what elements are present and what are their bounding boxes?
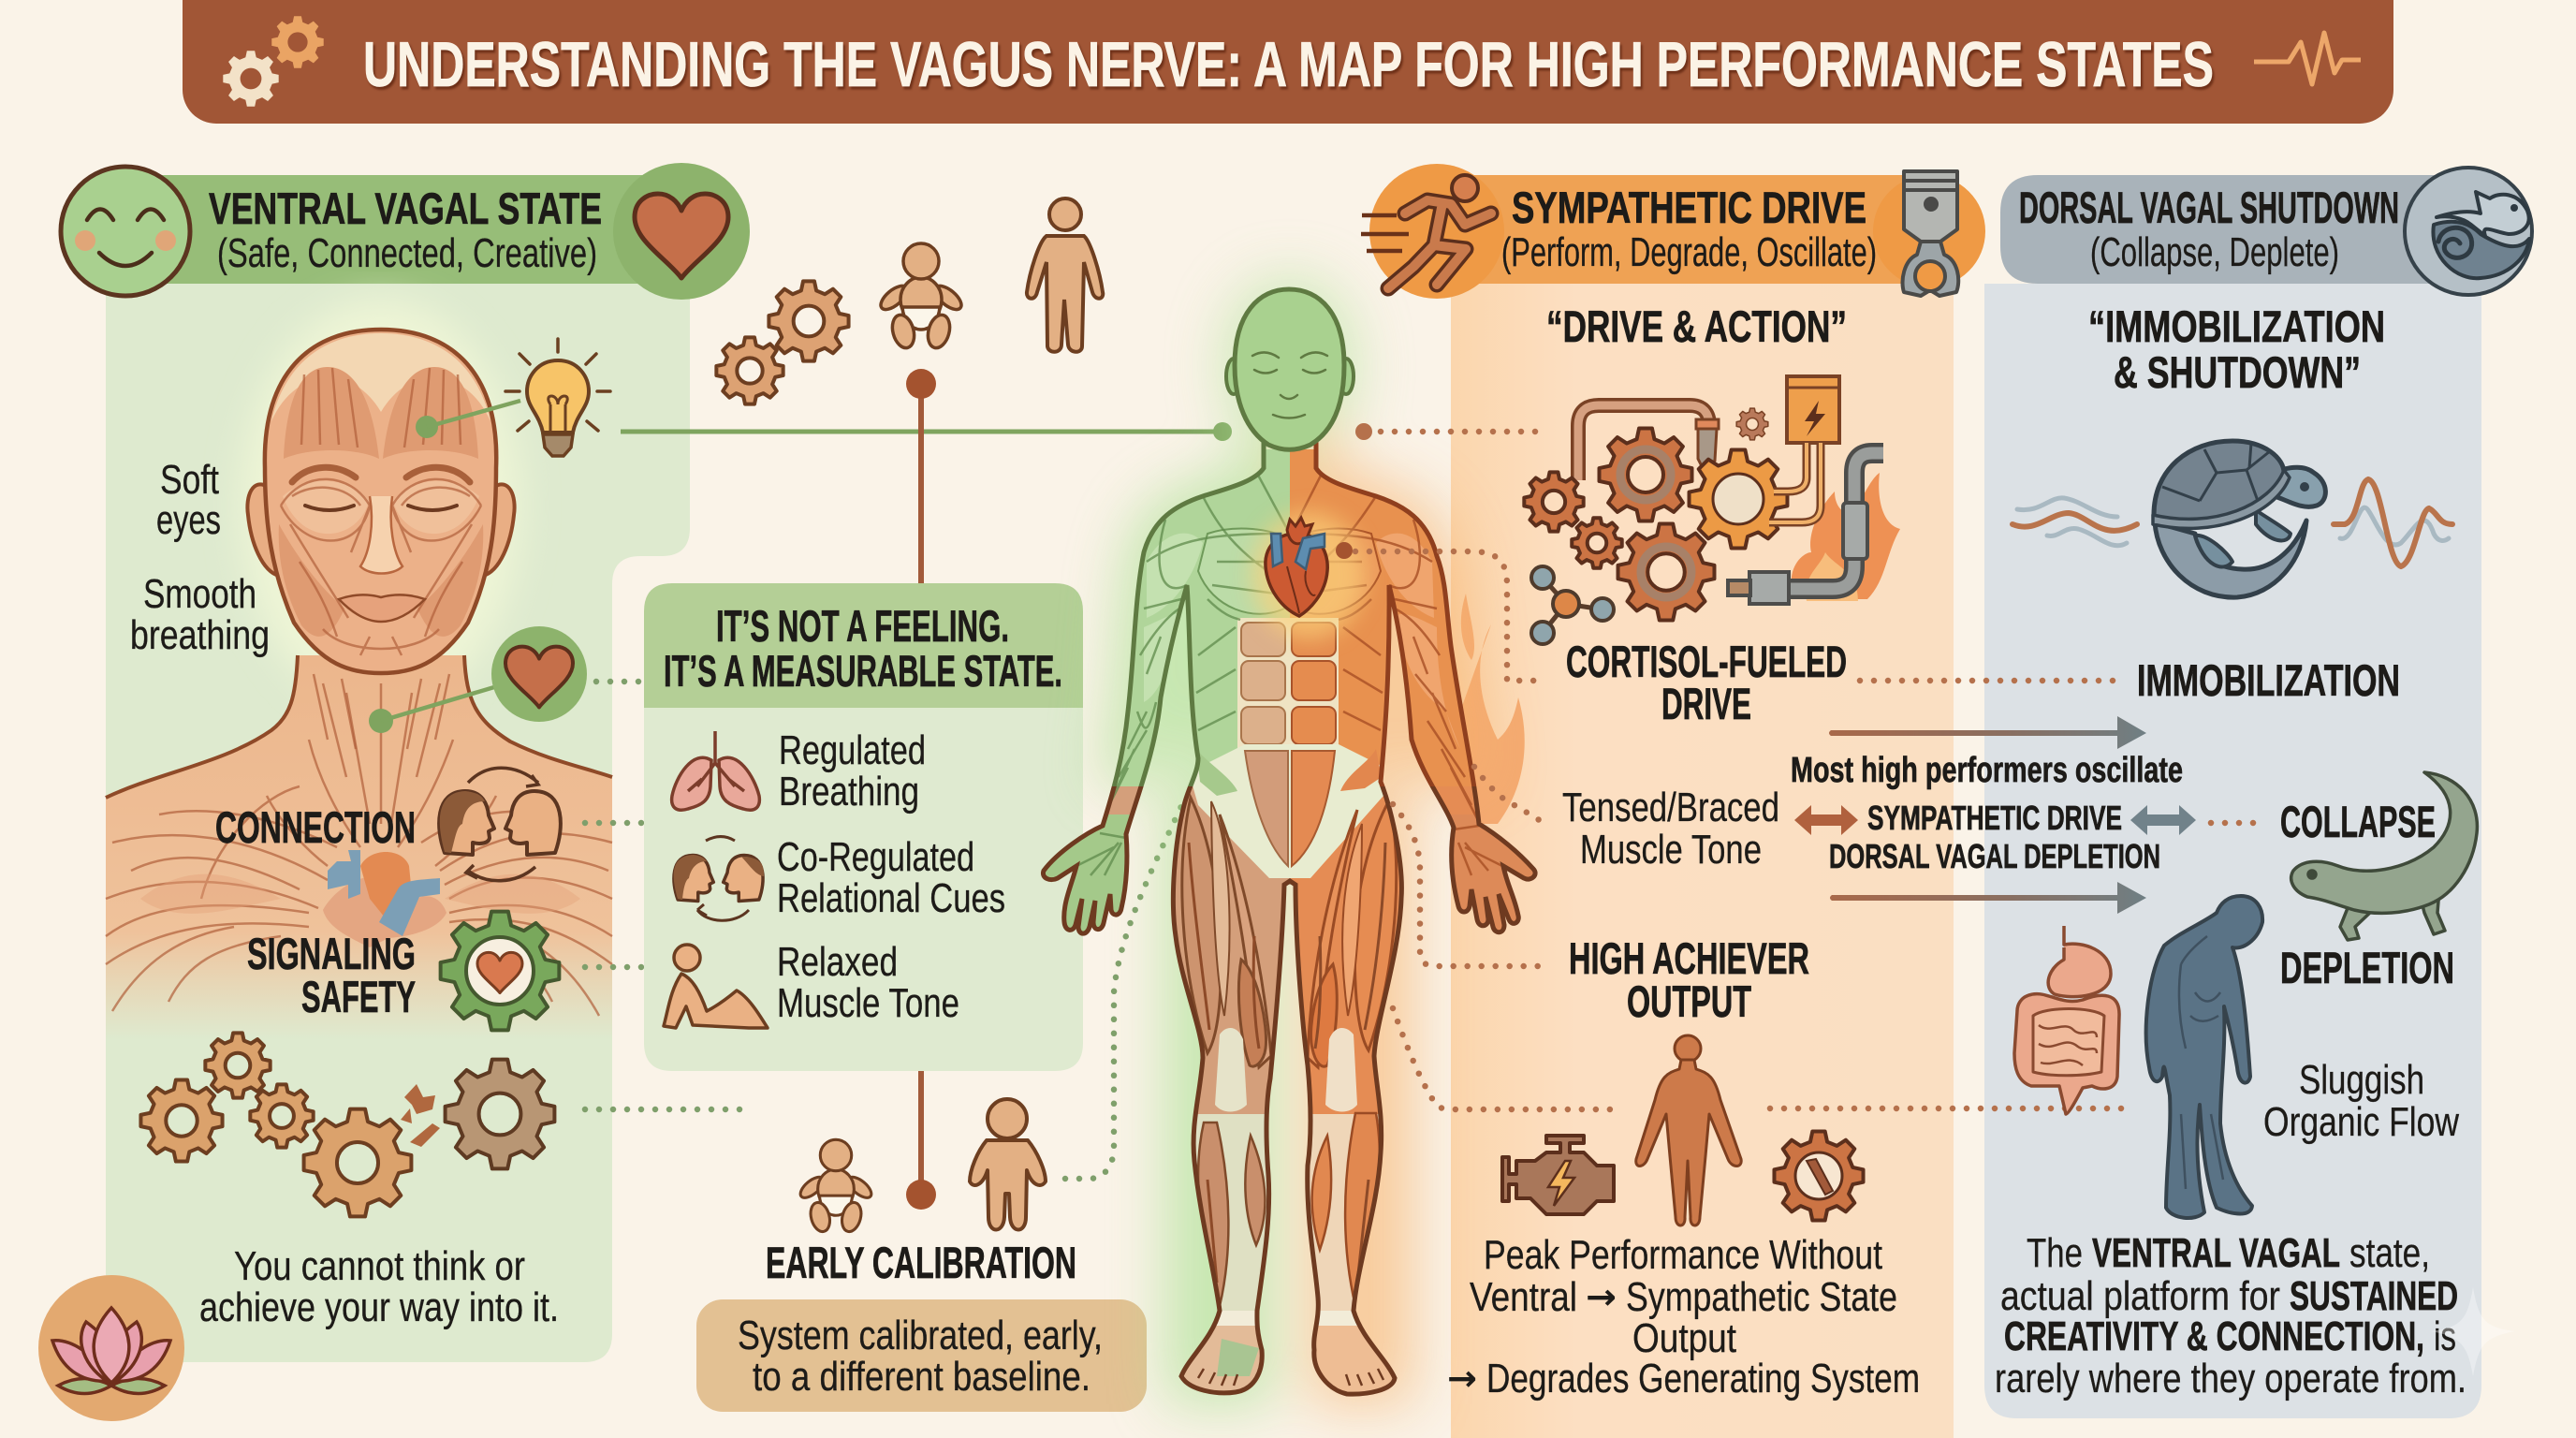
- icon: curled salamander: [2405, 168, 2532, 295]
- label: connection: CONNECTION: [215, 802, 416, 852]
- label: cortisol-fueled drive: DRIVE: [1661, 679, 1751, 728]
- icon: sparkle: [2431, 1287, 2515, 1376]
- subheading text: (Safe, Connected, Creative): [217, 230, 597, 276]
- gears: [1599, 429, 1692, 521]
- dotted connectors: ventral panel: [585, 682, 749, 1109]
- timeline connector: green line: [621, 422, 1232, 441]
- callout heading: IT’S NOT A FEELING.: [716, 601, 1009, 651]
- calf left: [1198, 1123, 1265, 1306]
- label: sluggish organic flow: Sluggish: [2299, 1057, 2424, 1103]
- head glow: [241, 300, 521, 712]
- label: collapse: COLLAPSE: [2280, 797, 2436, 846]
- ears: [1226, 359, 1241, 394]
- lower abs: [1245, 751, 1288, 866]
- icon: left waves: [2012, 498, 2137, 546]
- arm highlights right: [1376, 534, 1460, 749]
- timeline connector: brown line: [906, 369, 936, 1210]
- label: dorsal vagal depletion: DORSAL VAGAL DEPLETION: [1829, 837, 2160, 875]
- hip muscles: [1198, 753, 1237, 796]
- text: peak performance: [1447, 1232, 1920, 1401]
- right leg muscles: [1354, 800, 1397, 1050]
- text: ventral vagal platform summary: state,: [2349, 1230, 2430, 1276]
- subheading text: (Collapse, Deplete): [2090, 229, 2339, 275]
- label: co-regulated cues: Relational Cues: [777, 875, 1005, 921]
- icon: title gears: [223, 16, 324, 107]
- icon: lizard: [2291, 772, 2477, 940]
- heading text: VENTRAL VAGAL STATE: [209, 183, 602, 233]
- callout text: [738, 1313, 1103, 1400]
- nose: [360, 496, 402, 573]
- abs left: [1241, 623, 1285, 744]
- left leg muscles: [1182, 798, 1221, 1053]
- left ear: [247, 484, 281, 576]
- label: signaling safety: [247, 929, 416, 1021]
- icon: baby top: [877, 243, 965, 350]
- label: cortisol-fueled drive: [1566, 637, 1847, 728]
- label: regulated breathing: Regulated: [779, 727, 926, 773]
- text: ventral vagal platform summary: rarely where they operate from.: [1995, 1356, 2466, 1401]
- knees: [1215, 1028, 1247, 1112]
- icon: lightbulb with connector: [416, 339, 610, 456]
- text: peak performance: →: [1447, 1357, 1477, 1399]
- label: smooth breathing: Smooth: [143, 571, 256, 617]
- hand left: [1046, 814, 1130, 932]
- icon: engine gears and pipes: [1524, 376, 1900, 620]
- heading: immobilization and shutdown: & SHUTDOWN”: [2114, 347, 2361, 397]
- text: ventral vagal platform summary: [1995, 1230, 2466, 1401]
- header: dorsal vagal shutdown: [2000, 168, 2532, 295]
- icon: turtle: [2153, 441, 2325, 597]
- label: co-regulated cues: [777, 834, 1005, 921]
- body outline left: [1112, 442, 1266, 786]
- toe lines: [1198, 1369, 1383, 1386]
- fuel box: [1787, 376, 1839, 443]
- head shape: [265, 330, 496, 673]
- icon: right waves: [2334, 479, 2452, 566]
- icon: pulse line: [2254, 33, 2361, 84]
- leg fibres: [1189, 843, 1385, 1283]
- panel: ventral background: [106, 284, 690, 1362]
- icon: achiever figure: [1636, 1035, 1741, 1225]
- text: peak performance: Sympathetic State: [1626, 1274, 1897, 1320]
- icon: digestive system: [2014, 926, 2119, 1114]
- face: [1252, 352, 1327, 418]
- label: relaxed muscle tone: Relaxed: [777, 939, 898, 985]
- body outline legs: [1041, 786, 1538, 1397]
- torso: [106, 655, 612, 1040]
- mouth: [339, 594, 425, 622]
- arrow: bottom oscillation: [1830, 882, 2146, 914]
- body glow: [1043, 289, 1535, 1404]
- label: depletion: DEPLETION: [2280, 943, 2454, 992]
- text: peak performance: →: [1586, 1276, 1617, 1317]
- icon: two faces: [439, 768, 561, 881]
- icon: green gear with heart: [441, 912, 559, 1030]
- muscle detail: [281, 368, 481, 655]
- text: ventral vagal platform summary: is: [2434, 1313, 2456, 1359]
- hand fibres: [1076, 833, 1126, 875]
- grey pipe: [1787, 453, 1883, 589]
- label: sluggish organic flow: Organic Flow: [2263, 1099, 2459, 1145]
- icon: child early calibration: [970, 1099, 1046, 1230]
- dotted connectors: sympathetic: [1355, 423, 2265, 1109]
- label: smooth breathing: breathing: [130, 612, 270, 658]
- icon: running figure: [1361, 175, 1491, 288]
- icon: lotus badge: [38, 1275, 184, 1421]
- flames beside arm: [1460, 594, 1525, 824]
- heading text: SYMPATHETIC DRIVE: [1512, 183, 1866, 232]
- icon: heart badge: [613, 163, 750, 300]
- icon: baby early calibration: [797, 1139, 875, 1234]
- feet: [1183, 1326, 1260, 1391]
- icon: engine: [1502, 1136, 1614, 1214]
- label: sluggish organic flow: [2263, 1057, 2459, 1145]
- label: soft eyes: eyes: [156, 497, 221, 543]
- text: you cannot think: You cannot think or: [234, 1243, 525, 1289]
- icon: broken gears: [140, 1033, 554, 1216]
- abs right: [1292, 623, 1336, 744]
- scalp highlight: [271, 333, 490, 421]
- copper pipe: [1578, 405, 1709, 480]
- head: [1235, 289, 1344, 449]
- icon: small gears: [716, 281, 849, 404]
- icon: co-regulated faces: [674, 837, 764, 920]
- pecs: [1198, 529, 1286, 614]
- chest fibres: [106, 683, 612, 1016]
- arm highlights left: [1144, 534, 1203, 702]
- callout: measurable state: [644, 583, 1083, 1071]
- heading: drive and action: “DRIVE & ACTION”: [1546, 301, 1847, 351]
- body outline right: [1314, 442, 1477, 786]
- illustration: face and chest: [106, 300, 612, 1040]
- label: high achiever output: OUTPUT: [1627, 976, 1751, 1026]
- closed eyes: [305, 506, 457, 510]
- orange fibres: [1294, 468, 1479, 822]
- icon: adult top: [1027, 198, 1103, 352]
- label: regulated breathing: [779, 727, 926, 814]
- heading: early calibration: EARLY CALIBRATION: [766, 1238, 1076, 1287]
- flame: [1792, 473, 1900, 599]
- arrow: double grey: [2130, 805, 2196, 835]
- text: peak performance: Ventral: [1470, 1274, 1577, 1320]
- pipe joint: [1696, 419, 1719, 429]
- hand right: [1446, 814, 1540, 941]
- icon: molecule: [1531, 566, 1614, 644]
- header: ventral vagal state: [61, 163, 750, 300]
- callout heading: [664, 601, 1062, 696]
- callout text: to a different baseline.: [753, 1354, 1090, 1400]
- icon: smiley: [61, 167, 190, 296]
- eyebrows: [292, 467, 470, 482]
- title banner: [183, 0, 2393, 124]
- subheading text: (Perform, Degrade, Oscillate): [1501, 229, 1877, 275]
- label: high achiever output: [1569, 933, 1809, 1026]
- text: peak performance: Output: [1632, 1315, 1736, 1361]
- text: ventral vagal platform summary: actual platform for: [2000, 1273, 2280, 1319]
- icon: anatomical heart on chest: [1252, 512, 1365, 639]
- label: cortisol-fueled drive: CORTISOL-FUELED: [1566, 637, 1847, 686]
- label: relaxed muscle tone: [777, 939, 959, 1026]
- label: tensed braced muscle tone: Tensed/Braced: [1562, 785, 1779, 830]
- right ear: [481, 484, 515, 576]
- neck fibres: [314, 674, 449, 749]
- label: tensed braced muscle tone: Muscle Tone: [1580, 827, 1762, 873]
- arrow: top oscillation: [1829, 716, 2146, 749]
- label: smooth breathing: [130, 571, 270, 658]
- label: regulated breathing: Breathing: [779, 769, 919, 814]
- callout: system calibrated: [696, 1299, 1147, 1412]
- dotted connector: early calibration to body: [1065, 804, 1182, 1179]
- icon: lungs: [672, 731, 759, 810]
- text: ventral vagal platform summary: CREATIVITY & CONNECTION,: [2004, 1313, 2424, 1359]
- icon: gauge gear: [1774, 1131, 1864, 1221]
- icon: relaxed figure: [664, 945, 768, 1028]
- label: high achiever output: HIGH ACHIEVER: [1569, 933, 1809, 983]
- panel: dorsal background: [1984, 284, 2481, 1418]
- text: you cannot think: [199, 1243, 559, 1330]
- text: peak performance: Degrades Generating System: [1486, 1356, 1920, 1401]
- text: ventral vagal platform summary: SUSTAINED: [2290, 1273, 2458, 1319]
- label: tensed braced muscle tone: [1562, 785, 1779, 873]
- abdominal wall: [1237, 618, 1339, 758]
- header: sympathetic drive: [1361, 164, 1985, 299]
- text: ventral vagal platform summary: VENTRAL VAGAL: [2092, 1230, 2340, 1276]
- label: soft eyes: [156, 457, 221, 543]
- heading: immobilization and shutdown: [2088, 301, 2385, 397]
- text: ventral vagal platform summary: The: [2027, 1230, 2083, 1276]
- label: soft eyes: Soft: [160, 457, 219, 503]
- body muscles: [1046, 449, 1533, 1392]
- shoulder outline: [106, 655, 612, 798]
- icon: anatomical heart: [323, 850, 446, 947]
- icon: slumped figure: [2146, 896, 2262, 1218]
- label: relaxed muscle tone: Muscle Tone: [777, 980, 959, 1026]
- arrow: double brown: [1794, 805, 1858, 835]
- box pipes: [1769, 443, 1821, 522]
- label: signaling safety: SIGNALING: [247, 929, 416, 978]
- cheek muscles: [279, 524, 483, 637]
- callout text: System calibrated, early,: [738, 1313, 1103, 1358]
- text: peak performance: Peak Performance Without: [1484, 1232, 1882, 1278]
- heading: immobilization and shutdown: “IMMOBILIZATION: [2088, 301, 2385, 351]
- forehead muscles: [284, 367, 478, 459]
- panel: sympathetic background: [1451, 284, 1954, 1438]
- calf right: [1312, 1113, 1380, 1306]
- pelvis: [1189, 744, 1385, 878]
- text: most high performers: Most high performers oscillate: [1791, 751, 2183, 790]
- icon: piston: [1903, 171, 1958, 296]
- label: co-regulated cues: Co-Regulated: [777, 834, 974, 880]
- label: sympathetic drive: SYMPATHETIC DRIVE: [1867, 799, 2122, 837]
- callout heading: IT’S A MEASURABLE STATE.: [664, 646, 1062, 696]
- text: you cannot think: achieve your way into it.: [199, 1284, 559, 1330]
- broken bit: [1736, 408, 1768, 440]
- label: signaling safety: SAFETY: [301, 972, 416, 1021]
- central body figure: [1030, 289, 1561, 1423]
- green fibres: [1112, 476, 1286, 801]
- icon: heart badge with connector: [369, 626, 587, 733]
- label: immobilization: IMMOBILIZATION: [2137, 655, 2400, 705]
